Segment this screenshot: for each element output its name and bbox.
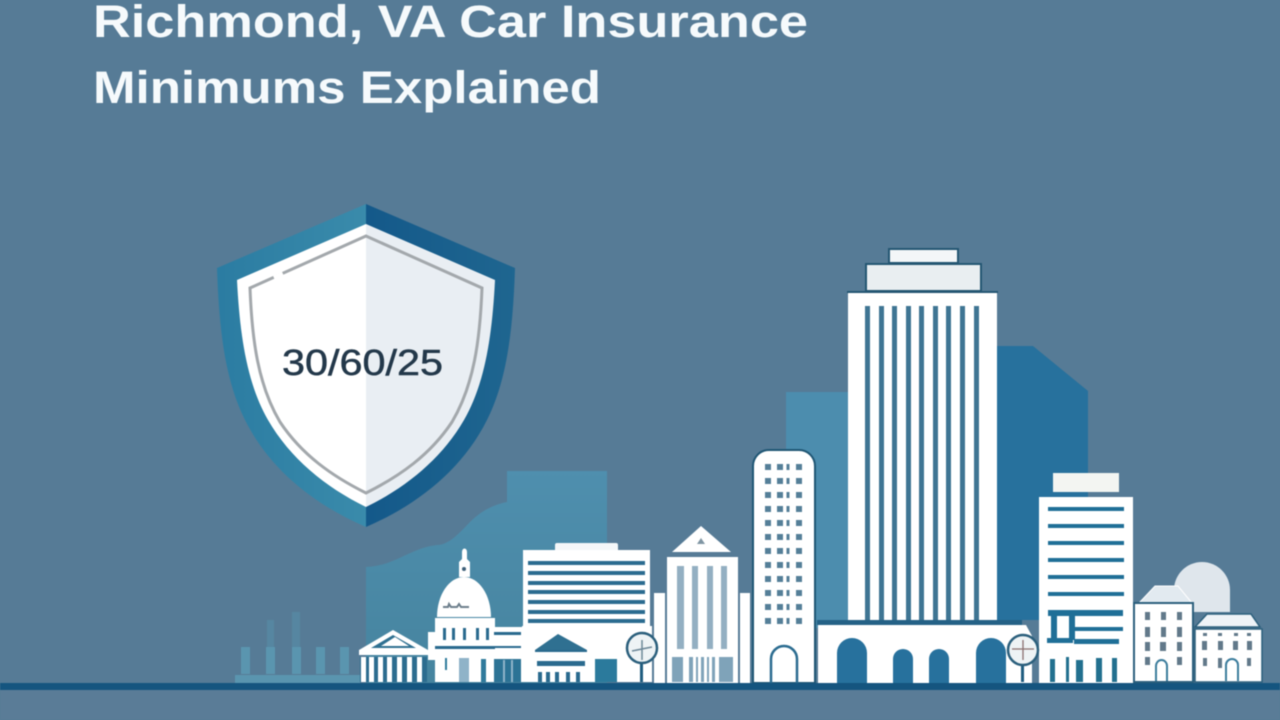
rear dome building [1174, 562, 1230, 612]
title [93, 0, 808, 113]
capitol wings [495, 627, 522, 682]
narrow white blocks [654, 593, 750, 683]
tree right [1008, 635, 1038, 682]
background skyline silhouettes [366, 346, 1088, 683]
title: Minimums Explained [93, 62, 601, 113]
lower ground strip [0, 690, 1280, 720]
main tower [817, 249, 1022, 625]
tree left [627, 633, 657, 682]
ground line [0, 683, 1280, 690]
capitol central block [435, 618, 495, 682]
rounded window tower [753, 450, 815, 683]
small house right [1195, 614, 1262, 682]
arcade base [818, 625, 1032, 683]
icon: shield with 30/60/25 limits [217, 204, 515, 527]
shield label: 30/60/25 [282, 342, 443, 383]
office building with horizontal bands [523, 543, 650, 640]
capitol building [359, 548, 522, 682]
left portico [359, 630, 435, 682]
small house left [1134, 586, 1193, 682]
capitol annex with pediment [522, 626, 652, 682]
capitol dome [437, 548, 491, 617]
pediment building [667, 526, 738, 683]
right banded building [1039, 473, 1133, 683]
faint distant skyline [235, 612, 360, 683]
